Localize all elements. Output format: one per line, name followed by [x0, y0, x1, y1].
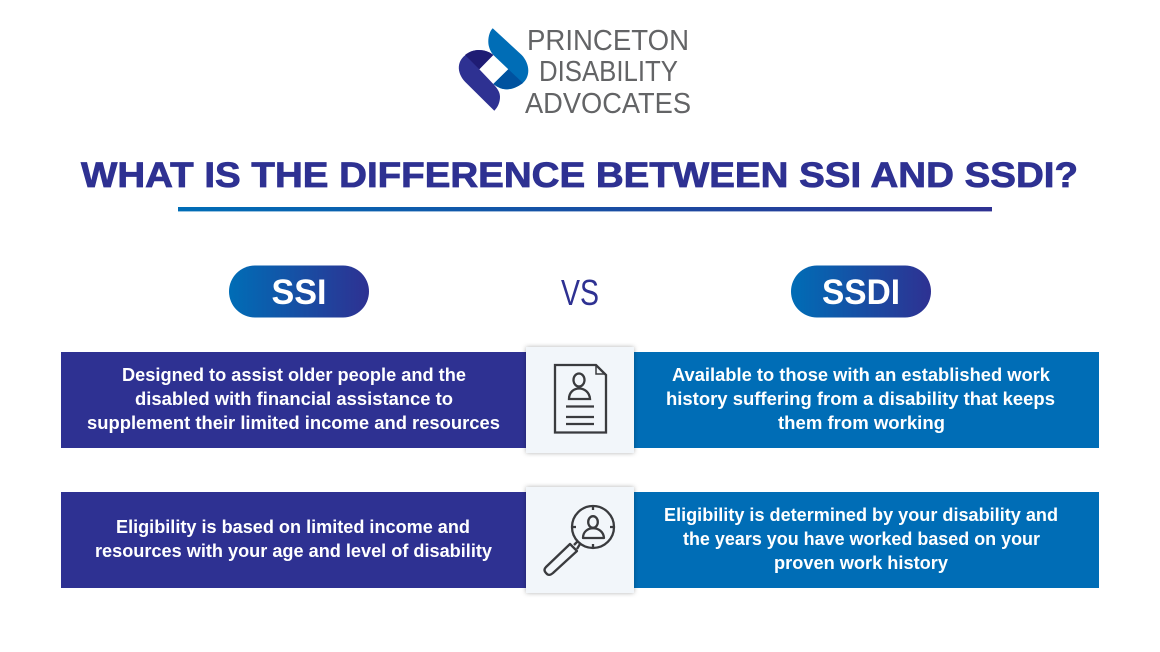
badge: SSI: SSI [272, 273, 326, 312]
panel: SSDI eligibility: the years you have worked based on your [683, 529, 1040, 549]
logo wordmark [525, 25, 691, 120]
panel: SSDI eligibility: proven work history [774, 553, 948, 573]
icon: document with person [526, 347, 634, 453]
VS label: VS [561, 272, 599, 313]
panel: SSI eligibility: resources with your age and level of disability [95, 541, 492, 561]
badge: SSI [229, 266, 369, 318]
panel: SSDI purpose: them from working [778, 413, 945, 433]
badge: SSDI [791, 266, 931, 318]
panel: SSI purpose: disabled with financial assistance to [135, 389, 453, 409]
panel: SSI purpose: Designed to assist older people and the [122, 365, 466, 385]
title underline [178, 207, 992, 211]
panel: SSDI eligibility: Eligibility is determined by your disability and [664, 505, 1058, 525]
panel: SSDI purpose [633, 352, 1099, 448]
panel: SSDI purpose: history suffering from a disability that keeps [666, 389, 1055, 409]
badge: SSDI: SSDI [822, 273, 900, 312]
logo [459, 25, 691, 120]
icon: magnifying glass with person [526, 487, 634, 593]
panel: SSI purpose [61, 352, 527, 448]
title: WHAT IS THE DIFFERENCE BETWEEN SSI AND SSDI? [81, 156, 1078, 195]
panel: SSDI purpose: Available to those with an established work [672, 365, 1051, 385]
logo wordmark: ADVOCATES [525, 88, 691, 120]
panel: SSDI eligibility [633, 492, 1099, 588]
panel: SSI purpose: supplement their limited income and resources [87, 413, 500, 433]
panel: SSI eligibility: Eligibility is based on limited income and [116, 517, 470, 537]
icon: logo mark [459, 28, 528, 111]
logo wordmark: PRINCETON [527, 25, 689, 57]
logo wordmark: DISABILITY [539, 56, 678, 88]
panel: SSI eligibility [61, 492, 527, 588]
